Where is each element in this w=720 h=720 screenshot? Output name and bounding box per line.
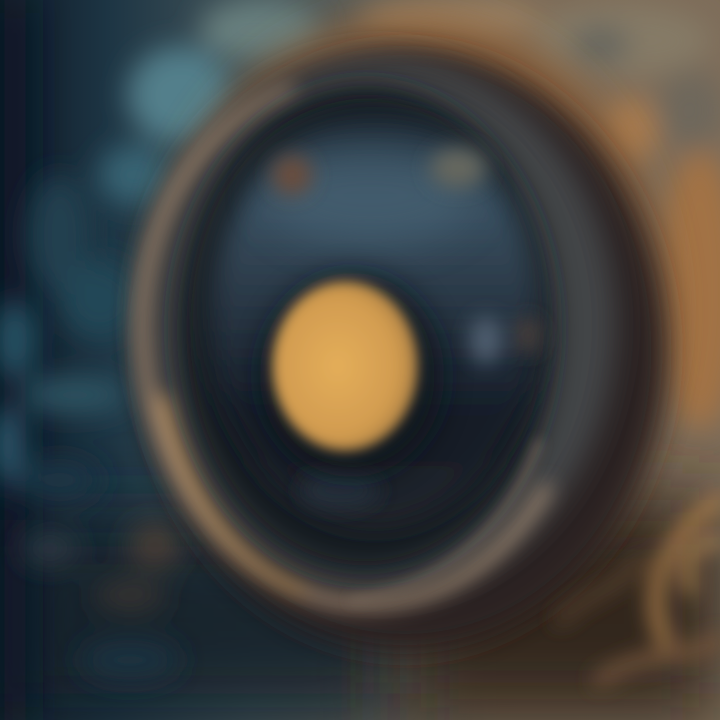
central yellow dome shadow bbox=[260, 273, 444, 477]
disc: dark shadow at right and bottom bbox=[143, 50, 667, 650]
disc: grey outer rim bbox=[140, 55, 616, 595]
disc: blue-grey inner face bbox=[210, 115, 540, 525]
top right tan mottled texture bbox=[360, 0, 720, 430]
bottom right ornament bbox=[560, 500, 720, 680]
disc: outer copper halo bbox=[155, 15, 665, 605]
disc: tan left rim highlight bbox=[142, 92, 545, 603]
disc: top blue highlight bbox=[265, 145, 475, 245]
disc: small copper spots bbox=[272, 148, 540, 508]
central yellow dome bbox=[272, 281, 418, 451]
left teal mottled texture bbox=[0, 0, 320, 680]
disc: dark inner well bbox=[177, 85, 553, 575]
disc: thin tan lower inner ring bbox=[350, 440, 540, 600]
